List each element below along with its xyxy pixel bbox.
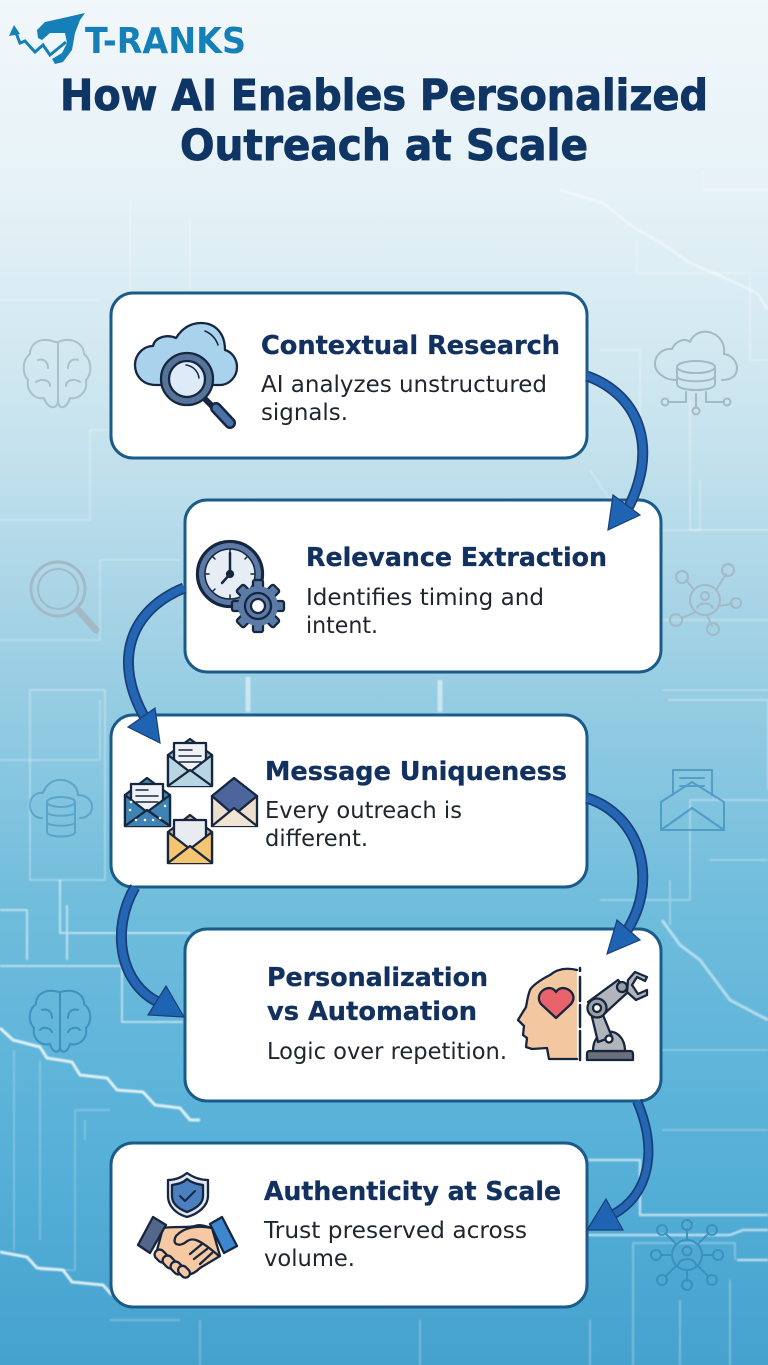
card 1 body: AI analyzes unstructured: [261, 370, 547, 398]
card 1: contextual research: [111, 293, 587, 458]
faint icon: magnifier left: [31, 562, 96, 630]
faint icon: envelope right: [661, 770, 724, 830]
envelope left: [125, 778, 170, 826]
card 3: message uniqueness: [111, 715, 587, 887]
logo: [9, 13, 246, 64]
card 2: relevance extraction: [185, 500, 661, 672]
card 1 body: signals.: [261, 398, 348, 426]
card 4 panel: [185, 929, 661, 1101]
card 4 heading: Personalization: [267, 963, 488, 993]
icon: shield and handshake: [138, 1173, 237, 1279]
card 1 panel: [111, 293, 587, 458]
faint icon: cloud database right top: [655, 332, 737, 414]
card 5 heading: Authenticity at Scale: [264, 1177, 561, 1207]
faint icon: cloud database left: [30, 780, 92, 836]
card 2 body: Identifies timing and: [306, 583, 544, 611]
title: Outreach at Scale: [180, 121, 588, 171]
card 3 panel: [111, 715, 587, 887]
card 5 panel: [111, 1143, 587, 1307]
arrow: card 4 to card 5: [587, 1101, 648, 1230]
arrow: card 3 to card 4 left: [121, 887, 184, 1017]
card 5 body: Trust preserved across: [263, 1216, 527, 1244]
faint icon: brain left top: [24, 340, 90, 407]
arrow: card 1 to card 2: [587, 376, 643, 530]
envelope bottom: [168, 815, 212, 863]
logo wordmark: T-RANKS: [85, 21, 246, 62]
card 2 heading: Relevance Extraction: [306, 543, 607, 573]
icon: clock and gear: [197, 541, 284, 632]
arrow: card 3 to card 4: [587, 798, 643, 954]
card 4 heading: vs Automation: [267, 997, 477, 1027]
title: How AI Enables Personalized: [60, 71, 708, 121]
envelope top: [168, 739, 212, 786]
title: [60, 71, 708, 171]
faint icon: network right: [670, 564, 741, 635]
logo: arrow head: [9, 25, 20, 36]
envelope right: [212, 778, 257, 826]
icon: human head and robot arm: [518, 968, 647, 1060]
card 2 panel: [185, 500, 661, 672]
card 3 body: Every outreach is: [265, 796, 462, 824]
card 2 body: intent.: [306, 611, 378, 639]
card 4: personalization vs automation: [185, 929, 661, 1101]
arrow: card 2 to card 3: [128, 588, 184, 743]
card 4 body: Logic over repetition.: [267, 1037, 507, 1065]
icon: cloud with magnifier: [135, 323, 237, 423]
card 3 heading: Message Uniqueness: [265, 757, 567, 787]
icon: four envelopes: [125, 739, 257, 863]
card 5 body: volume.: [264, 1244, 355, 1272]
card 1 heading: Contextual Research: [261, 331, 560, 361]
card 5: authenticity at scale: [111, 1143, 587, 1307]
card 3 body: different.: [265, 824, 368, 852]
logo: t-rex head: [37, 13, 85, 64]
logo: rising zigzag arrow: [16, 33, 66, 55]
faint icon: brain left bottom: [30, 991, 90, 1052]
faint icon: network bottom right: [651, 1220, 723, 1290]
